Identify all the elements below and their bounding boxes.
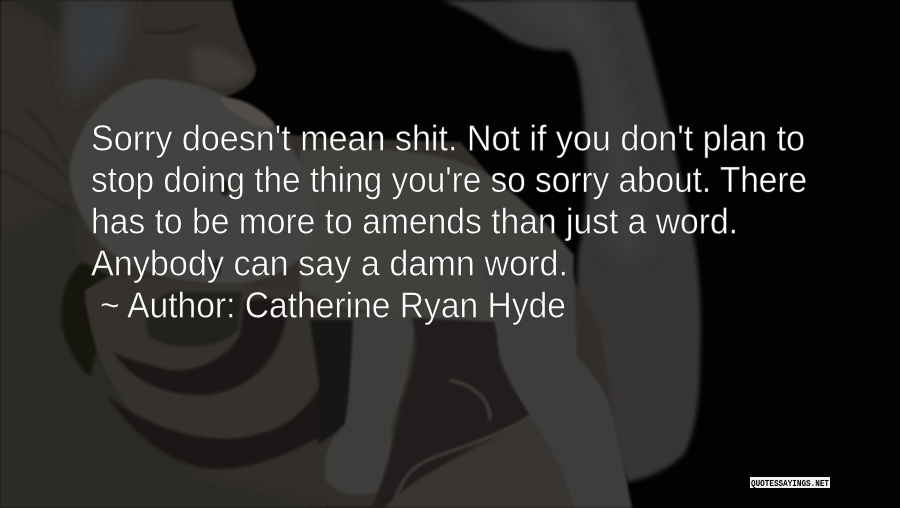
man's arm and shoulder [440,0,701,482]
baby's ear [213,260,221,276]
dark tattoo at right of arm [310,320,355,445]
tattoo: upper swirl [146,292,242,347]
line 2: stop doing the thing you're so sorry about. There [91,159,807,200]
baby's arm and hand [325,312,414,495]
watermark: QUOTESSAYINGS.NET [751,479,829,489]
tattoo: inner dark swirl [113,298,288,395]
man's closed eye [145,24,200,34]
man's hair [0,0,62,35]
baby head [70,79,316,284]
baby's arm ear loop [331,343,353,427]
tattoo: outer dark crescent [106,330,350,469]
dark tattoo right of arm [372,318,530,508]
tattoo: base [85,276,352,464]
collar folds [0,108,75,215]
baby body [300,148,573,340]
tattoo ornaments right of arm [395,380,532,500]
quote text [91,118,807,326]
baby's eye [220,180,230,196]
baby's leg [480,254,632,508]
father's fingers on the head [220,98,274,128]
line 1: Sorry doesn't mean shit. Not if you don't plan to [91,118,805,159]
dark crescent behind the baby [61,262,110,376]
lower torso [385,418,578,508]
line 4: Anybody can say a damn word. [91,242,568,284]
face highlights [60,0,130,100]
arm highlight [500,0,650,254]
man's face and torso [0,0,630,508]
shaded torso [0,200,330,508]
author line: ~ Author: Catherine Ryan Hyde [100,284,566,326]
line 3: has to be more to amends than just a word. [91,200,738,242]
